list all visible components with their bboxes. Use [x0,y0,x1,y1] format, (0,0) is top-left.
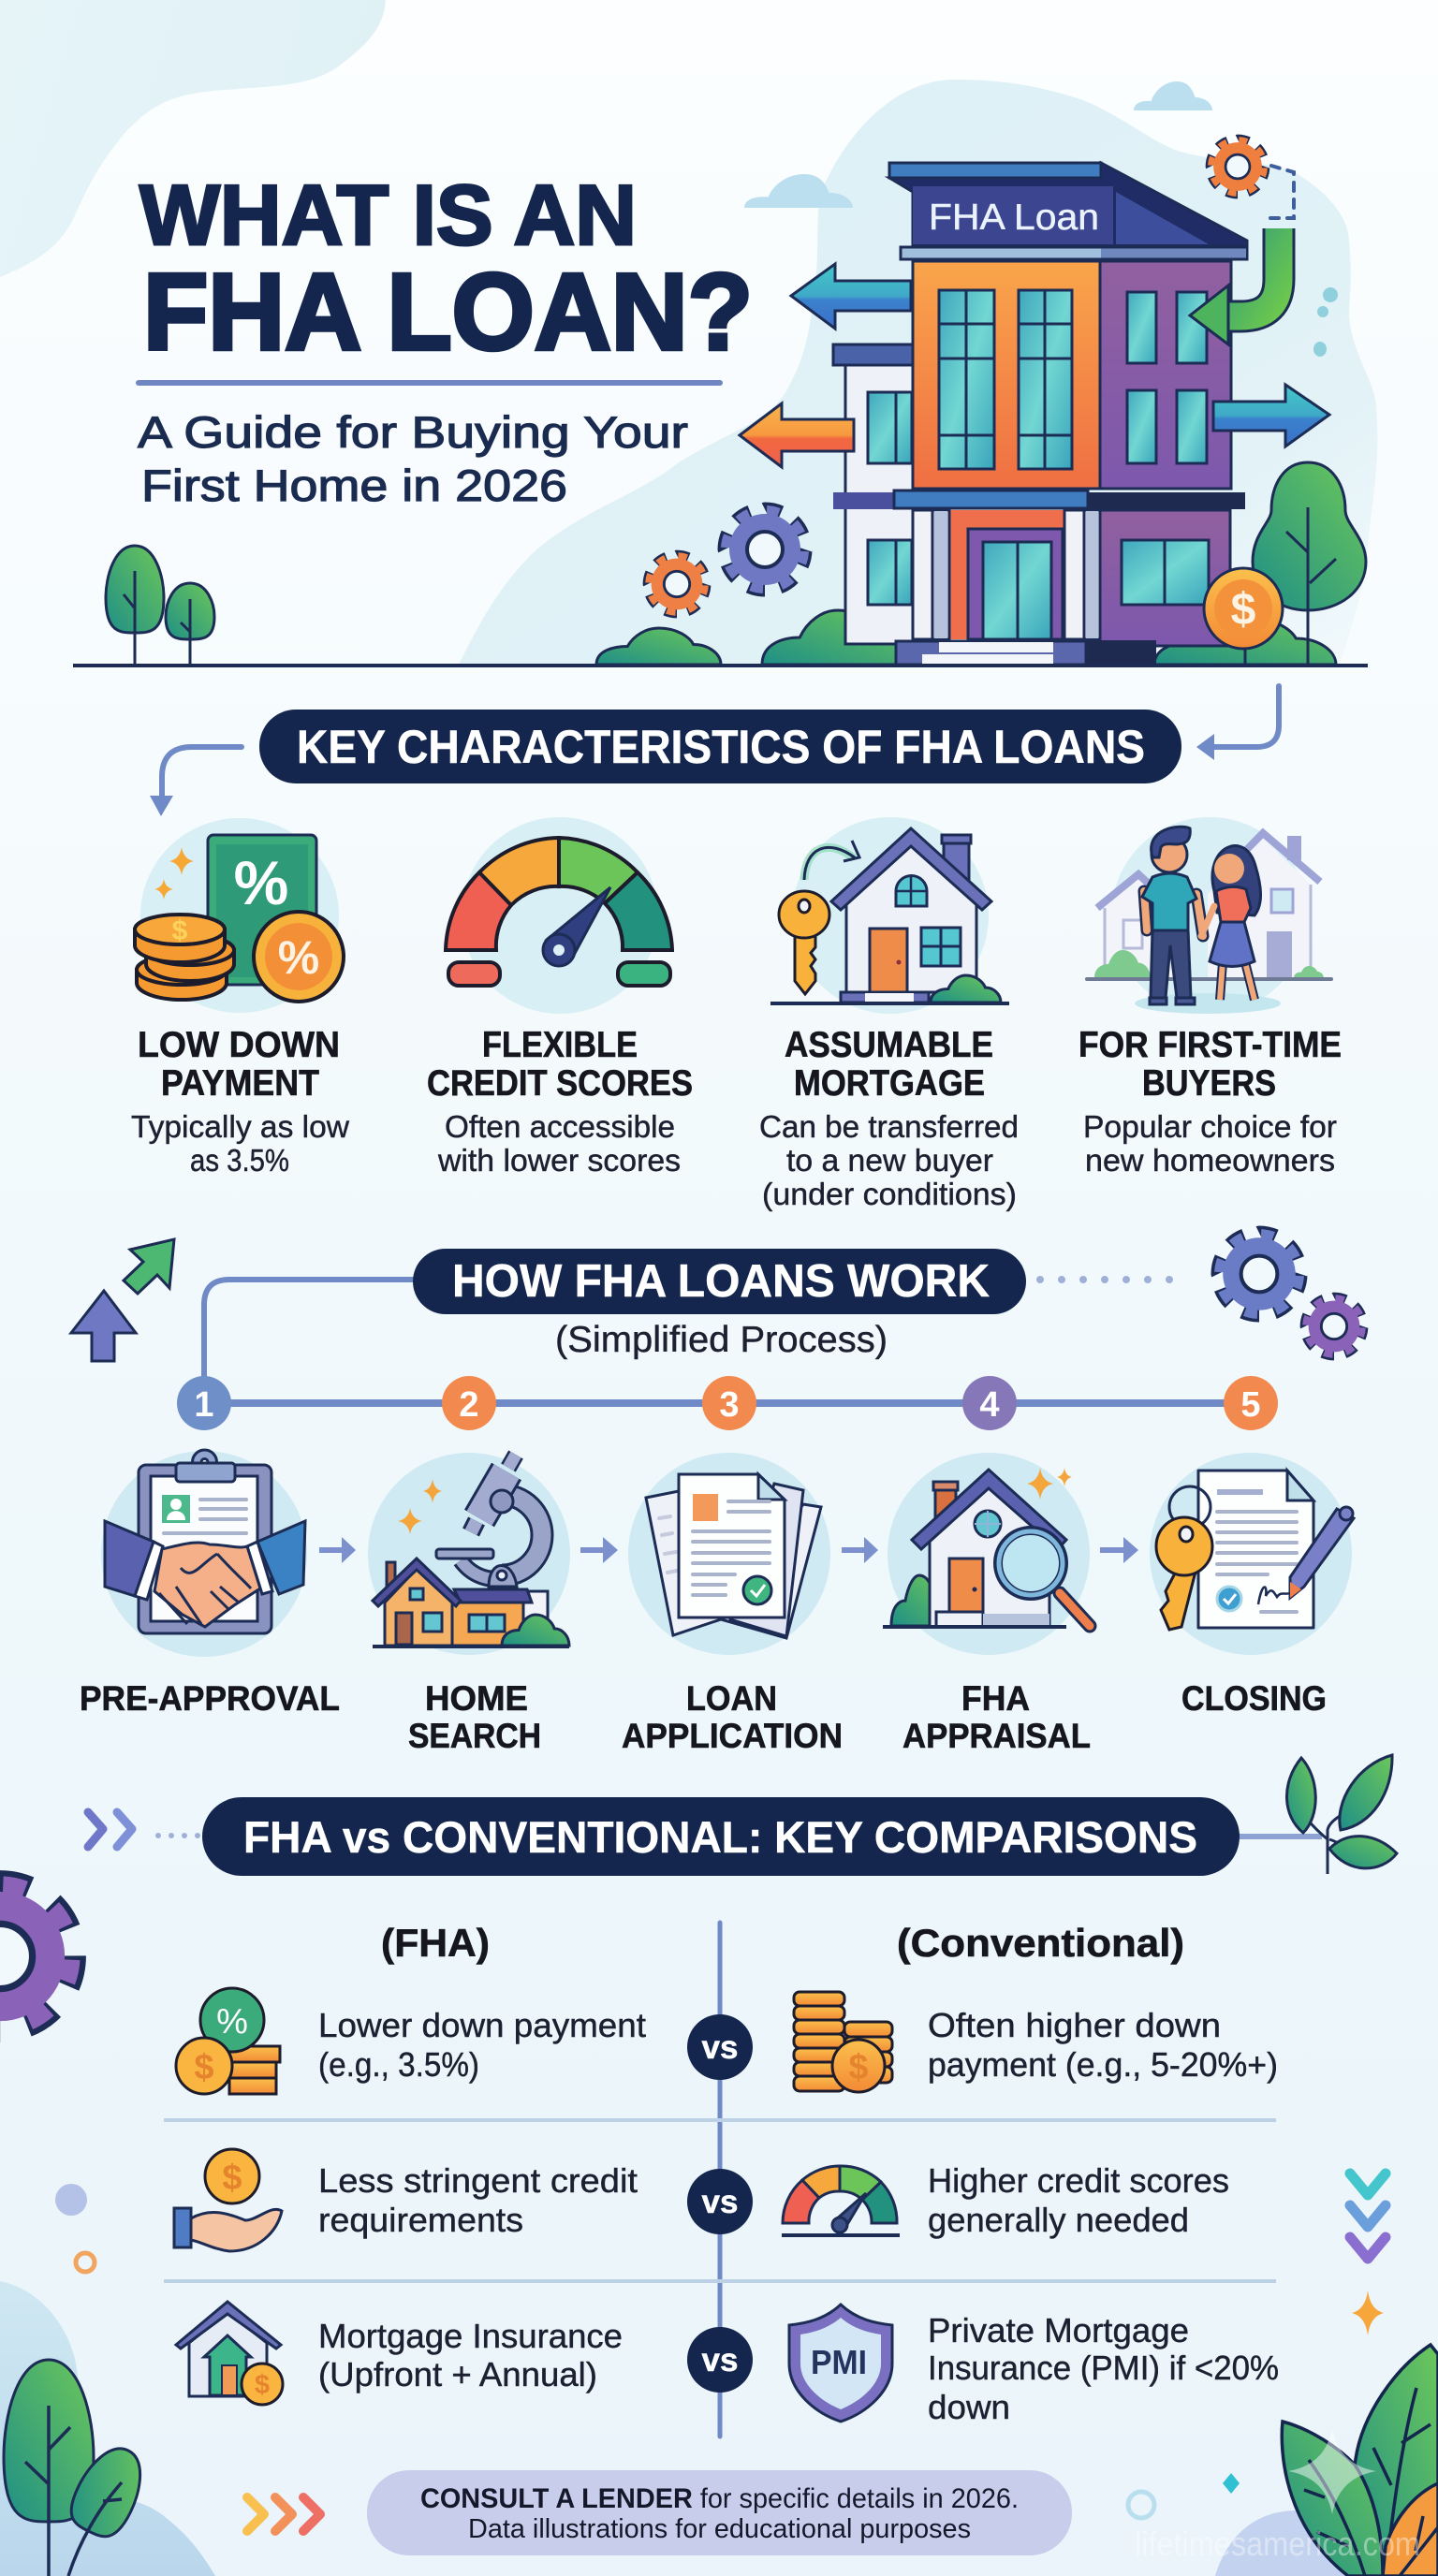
arrow: right connector [1196,686,1279,760]
title [139,168,753,373]
icon: hand and coin [174,2149,282,2251]
label: PAYMENT [161,1063,319,1104]
callout: consult a lender: CONSULT A LENDER for specific details in 2026. [420,2483,1019,2514]
title: WHAT IS AN [139,168,637,263]
arrow: purple up [71,1291,136,1361]
mid band [833,490,1245,509]
text: conventional down payment: payment (e.g., 5-20%+) [928,2045,1278,2084]
timeline: 3 [719,1385,740,1425]
step 5: closing [1150,1453,1354,1718]
description [131,1109,349,1178]
text: conventional insurance: Private Mortgage [928,2311,1189,2349]
label: BUYERS [1142,1063,1276,1104]
text: FHA down payment: Lower down payment [318,2006,646,2044]
decorative dots [1313,287,1338,357]
icon: house and magnifier [883,1453,1090,1655]
heading pill [413,1249,1026,1314]
description: to a new buyer [786,1143,993,1178]
chevrons bottom [247,2497,320,2531]
description: with lower scores [437,1143,681,1178]
step 3: loan application [622,1453,843,1755]
label: APPLICATION [622,1717,843,1755]
arrow: green curved [1190,228,1279,344]
row: down payment [176,1988,1278,2094]
column header: Conventional: (Conventional) [897,1921,1184,1965]
label [902,1679,1091,1755]
subtitle: A Guide for Buying Your [138,407,688,457]
icon: left trees [106,546,214,666]
label [408,1679,541,1755]
text: FHA credit: Less stringent credit [318,2161,638,2200]
icon: house with coin [176,2302,283,2405]
arrow: left connector [150,747,242,816]
card: flexible credit scores [427,817,693,1178]
label: LOW DOWN [138,1025,340,1065]
icon: credit gauge [446,817,672,1014]
label: CREDIT SCORES [427,1063,693,1104]
heading pill: HOW FHA LOANS WORK [452,1256,990,1307]
icon: money and coins: % [234,848,288,917]
card: low down payment [131,818,349,1178]
clouds [744,81,1212,208]
heading pill: KEY CHARACTERISTICS OF FHA LOANS [297,721,1145,773]
roof [889,163,1247,259]
icon: bushes [596,610,1336,665]
text: FHA credit: requirements [318,2201,523,2239]
description: Often accessible [445,1109,675,1144]
icon: cropped purple gear [0,1883,73,2029]
house background blob [459,80,1377,665]
icon: FHA coins: $ [194,2048,214,2087]
card: first-time buyers [1078,817,1342,1178]
section: comparison [0,1755,1397,2437]
icon: documents [628,1453,830,1655]
arrow: orange left [740,403,854,467]
description [759,1109,1019,1211]
callout: consult a lender [367,2470,1072,2555]
label: FLEXIBLE [482,1025,638,1065]
ground line [73,664,1368,667]
step 4: FHA appraisal [883,1453,1091,1755]
bottom-right blob [1215,2510,1438,2576]
description: as 3.5% [190,1143,289,1178]
label: LOAN [686,1679,777,1718]
label [427,1025,693,1104]
icon: key and house [770,817,1009,1014]
row dividers [164,2120,1276,2281]
column divider [717,1923,723,2437]
icon: money and coins: $ [172,915,188,946]
description [1083,1109,1337,1178]
label: FHA [961,1679,1030,1718]
section: key characteristics [131,686,1342,1211]
top-left background blob [0,0,386,277]
step 1: pre-approval [80,1450,340,1718]
vs badge [687,2169,753,2234]
icon: FHA coins: % [216,2002,248,2042]
icon: gears near house [648,139,1265,613]
text: FHA down payment [318,2006,646,2084]
illustration: FHA building [833,163,1247,665]
label: FOR FIRST-TIME [1078,1025,1342,1065]
heading pill [259,710,1181,783]
subtitle: First Home in 2026 [141,461,567,510]
connector to branch [1236,1834,1322,1839]
icon: left plant [4,2360,154,2576]
chevrons left of heading [88,1812,132,1847]
dotted trail [1040,1276,1170,1283]
icon: hand and coin: $ [222,2159,242,2198]
section: how FHA loans work [71,1233,1363,1755]
title: FHA LOAN? [143,251,753,373]
icon: keys, contract and pen [1150,1453,1354,1655]
timeline: 1 [194,1385,214,1425]
text: conventional credit: Higher credit scores [928,2161,1229,2200]
text: conventional down payment [928,2006,1278,2084]
bottom-left blob [0,2281,215,2576]
woman [1201,846,1261,1000]
man [1142,827,1203,1004]
text: conventional insurance [928,2311,1279,2426]
vs badge: vs [702,2184,738,2220]
label [785,1025,993,1104]
label: CLOSING [1181,1679,1327,1718]
icon: gears [1218,1233,1363,1355]
vs badge: vs [702,2029,738,2066]
text: FHA insurance [318,2317,623,2393]
icon: money and coins: % [278,931,319,984]
description [437,1109,681,1178]
text: FHA credit [318,2161,638,2239]
vs badge: vs [702,2342,738,2378]
subtitle [138,407,688,510]
coin symbol: $ [848,2048,869,2087]
heading pill: FHA vs CONVENTIONAL: KEY COMPARISONS [243,1812,1197,1862]
icon: couple and house [1087,817,1331,1014]
timeline: 2 [459,1385,479,1425]
card: assumable mortgage [759,817,1019,1211]
left annex [833,344,913,644]
icon: conventional coin stacks [794,1992,892,2092]
column header: FHA: (FHA) [381,1921,490,1965]
label: HOME [425,1679,528,1718]
text: FHA down payment: (e.g., 3.5%) [318,2045,479,2084]
row: insurance [176,2302,1279,2426]
icon: PMI shield [789,2305,892,2422]
upper facade [913,261,1231,489]
arrow: blue right [1213,385,1329,446]
description: Popular choice for [1083,1109,1337,1144]
text: conventional insurance: down [928,2388,1010,2426]
icon: small gauge [782,2166,900,2235]
dotted trail [158,1833,198,1838]
dashed connector [1265,166,1294,218]
icon: PMI shield: PMI [811,2343,867,2381]
text: FHA insurance: Mortgage Insurance [318,2317,623,2355]
timeline [177,1376,1278,1430]
coin stack [135,915,234,1000]
decorative shapes [55,2174,1386,2518]
text: FHA insurance: (Upfront + Annual) [318,2355,597,2393]
icon: house with coin: $ [255,2370,270,2400]
icon: money and coins [135,818,344,1013]
vs badge [687,2014,753,2080]
icon: dollar coin: $ [1231,585,1256,635]
label: ASSUMABLE [785,1025,993,1065]
timeline: 5 [1240,1385,1261,1425]
text: conventional down payment: Often higher down [928,2006,1221,2044]
label: MORTGAGE [794,1063,985,1104]
title divider [139,380,720,386]
process arrows [319,1537,1138,1563]
subheading: (Simplified Process) [555,1320,888,1360]
text: conventional insurance: Insurance (PMI) if <20% [928,2349,1279,2387]
icon: microscope and house [368,1453,570,1655]
label [138,1025,340,1104]
description: (under conditions) [762,1177,1017,1211]
roof: FHA Loan [929,198,1099,238]
label [622,1679,843,1755]
description: Typically as low [131,1109,349,1144]
row: credit [174,2149,1229,2251]
text: conventional credit [928,2161,1229,2239]
icon: leafy branch [1286,1755,1397,1874]
arrow: blue left [791,264,911,329]
icon: right tree [1253,462,1366,666]
timeline: 4 [979,1385,1000,1425]
vs badge [687,2327,753,2393]
description: Can be transferred [759,1109,1019,1144]
icon: FHA coins [176,1988,280,2094]
arrow: green diagonal [124,1239,174,1294]
watermark star [1288,2428,1376,2514]
heading pill [202,1797,1240,1876]
label [1078,1025,1342,1104]
icon: dollar coin [1204,568,1283,666]
connector line to step 1 [204,1280,413,1380]
label: APPRAISAL [902,1717,1091,1755]
description: new homeowners [1085,1143,1335,1178]
step 2: home search [368,1453,570,1755]
label: PRE-APPROVAL [80,1679,340,1718]
icon: right plant [1282,2345,1438,2576]
icon: clipboard and handshake [101,1450,307,1657]
ground floor [896,510,1230,665]
callout: consult a lender: Data illustrations for educational purposes [468,2514,971,2544]
label: SEARCH [408,1717,541,1755]
text: conventional credit: generally needed [928,2201,1189,2239]
